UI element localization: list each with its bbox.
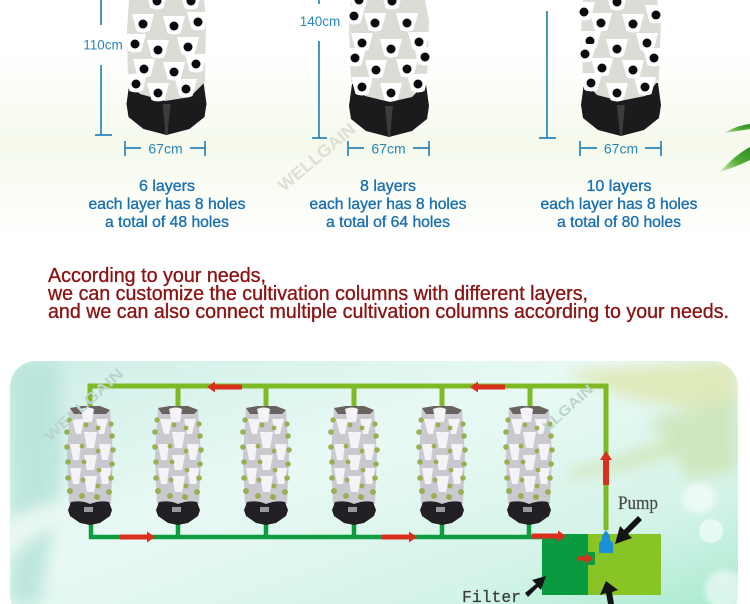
panel: system diagram — [10, 361, 745, 604]
width dimension 67cm: 67cm — [371, 140, 406, 156]
cultivation tower 1 — [64, 406, 116, 525]
width dimension 67cm: 67cm — [148, 140, 183, 156]
arrow: to water tank — [600, 581, 618, 604]
icon: green leaves at right edge — [720, 124, 750, 172]
arrow: bottom pipe 2 — [382, 532, 417, 542]
arrow: top pipe 2 — [470, 382, 505, 392]
arrow: top pipe 1 — [207, 382, 242, 392]
text block: customization note: and we can also connect multiple cultivation columns according to your needs. — [48, 301, 729, 323]
pale green top wash — [0, 50, 750, 240]
diagram: return pipe top — [90, 386, 606, 530]
watermark: WELLGAIN right: LLGAIN — [539, 381, 596, 434]
watermark: WELLGAIN top: WELLGAIN — [274, 119, 359, 195]
caption: 6 layers — [88, 178, 246, 231]
arrow: filter outlet — [578, 554, 593, 564]
panel: 8 layer tower — [300, 0, 466, 231]
caption: 6 layers: each layer has 8 holes — [88, 196, 246, 213]
height dimension 110cm: 110cm — [83, 38, 123, 52]
watermark: WELLGAIN left: WELLGAIN — [41, 365, 127, 445]
caption: 10 layers: each layer has 8 holes — [540, 196, 698, 213]
caption: 6 layers: a total of 48 holes — [105, 214, 229, 231]
panel: 10 layer tower — [539, 0, 698, 231]
decorative blurred leaves — [10, 361, 738, 604]
panel background — [10, 361, 738, 604]
arrows: flow direction — [120, 382, 612, 564]
height dimension 140cm — [300, 0, 340, 138]
icon: blue pump — [599, 530, 613, 553]
width dimension 67cm — [348, 140, 429, 156]
cultivation tower 6 — [503, 406, 555, 525]
caption: 8 layers — [310, 178, 466, 231]
caption: 10 layers: a total of 80 holes — [557, 214, 681, 231]
diagram: supply pipe bottom — [91, 518, 545, 537]
panel: 6 layer tower — [83, 0, 246, 231]
width dimension 67cm — [125, 140, 205, 156]
tank: filter — [542, 534, 589, 595]
text block: customization note — [47, 265, 729, 323]
icon: 8 layer column — [343, 0, 436, 137]
width dimension 67cm: 67cm — [604, 140, 638, 156]
width dimension 67cm — [580, 140, 661, 156]
icon: 10 layer column — [573, 0, 667, 136]
height dimension 110cm — [83, 0, 123, 135]
text block: customization note: we can customize the cultivation columns with different layers, — [47, 283, 588, 305]
text block: customization note: According to your needs, — [48, 265, 266, 287]
height dimension 140cm: 140cm — [300, 14, 340, 29]
arrow: riser — [600, 451, 612, 485]
bokeh circles — [682, 482, 738, 604]
cultivation tower 2 — [152, 406, 204, 525]
icon: 6 layer column — [124, 0, 209, 135]
tank: water — [588, 534, 661, 595]
cultivation tower 3 — [240, 406, 292, 525]
cultivation tower 5 — [416, 406, 468, 525]
cultivation tower 4 — [328, 406, 380, 525]
label: Pump: Pump — [618, 493, 658, 514]
caption: 6 layers: 6 layers — [139, 178, 195, 195]
caption: 10 layers: 10 layers — [587, 178, 651, 195]
caption: 8 layers: a total of 64 holes — [326, 214, 450, 231]
caption: 8 layers: each layer has 8 holes — [310, 196, 466, 213]
connector notch — [586, 552, 595, 565]
caption: 10 layers — [540, 178, 698, 231]
arrow: bottom pipe 3 — [532, 530, 566, 542]
arrow: bottom pipe 1 — [120, 532, 155, 542]
caption: 8 layers: 8 layers — [360, 178, 416, 195]
arrow: to filter — [525, 576, 546, 597]
height dimension — [539, 11, 556, 138]
arrow: to pump — [615, 516, 642, 544]
